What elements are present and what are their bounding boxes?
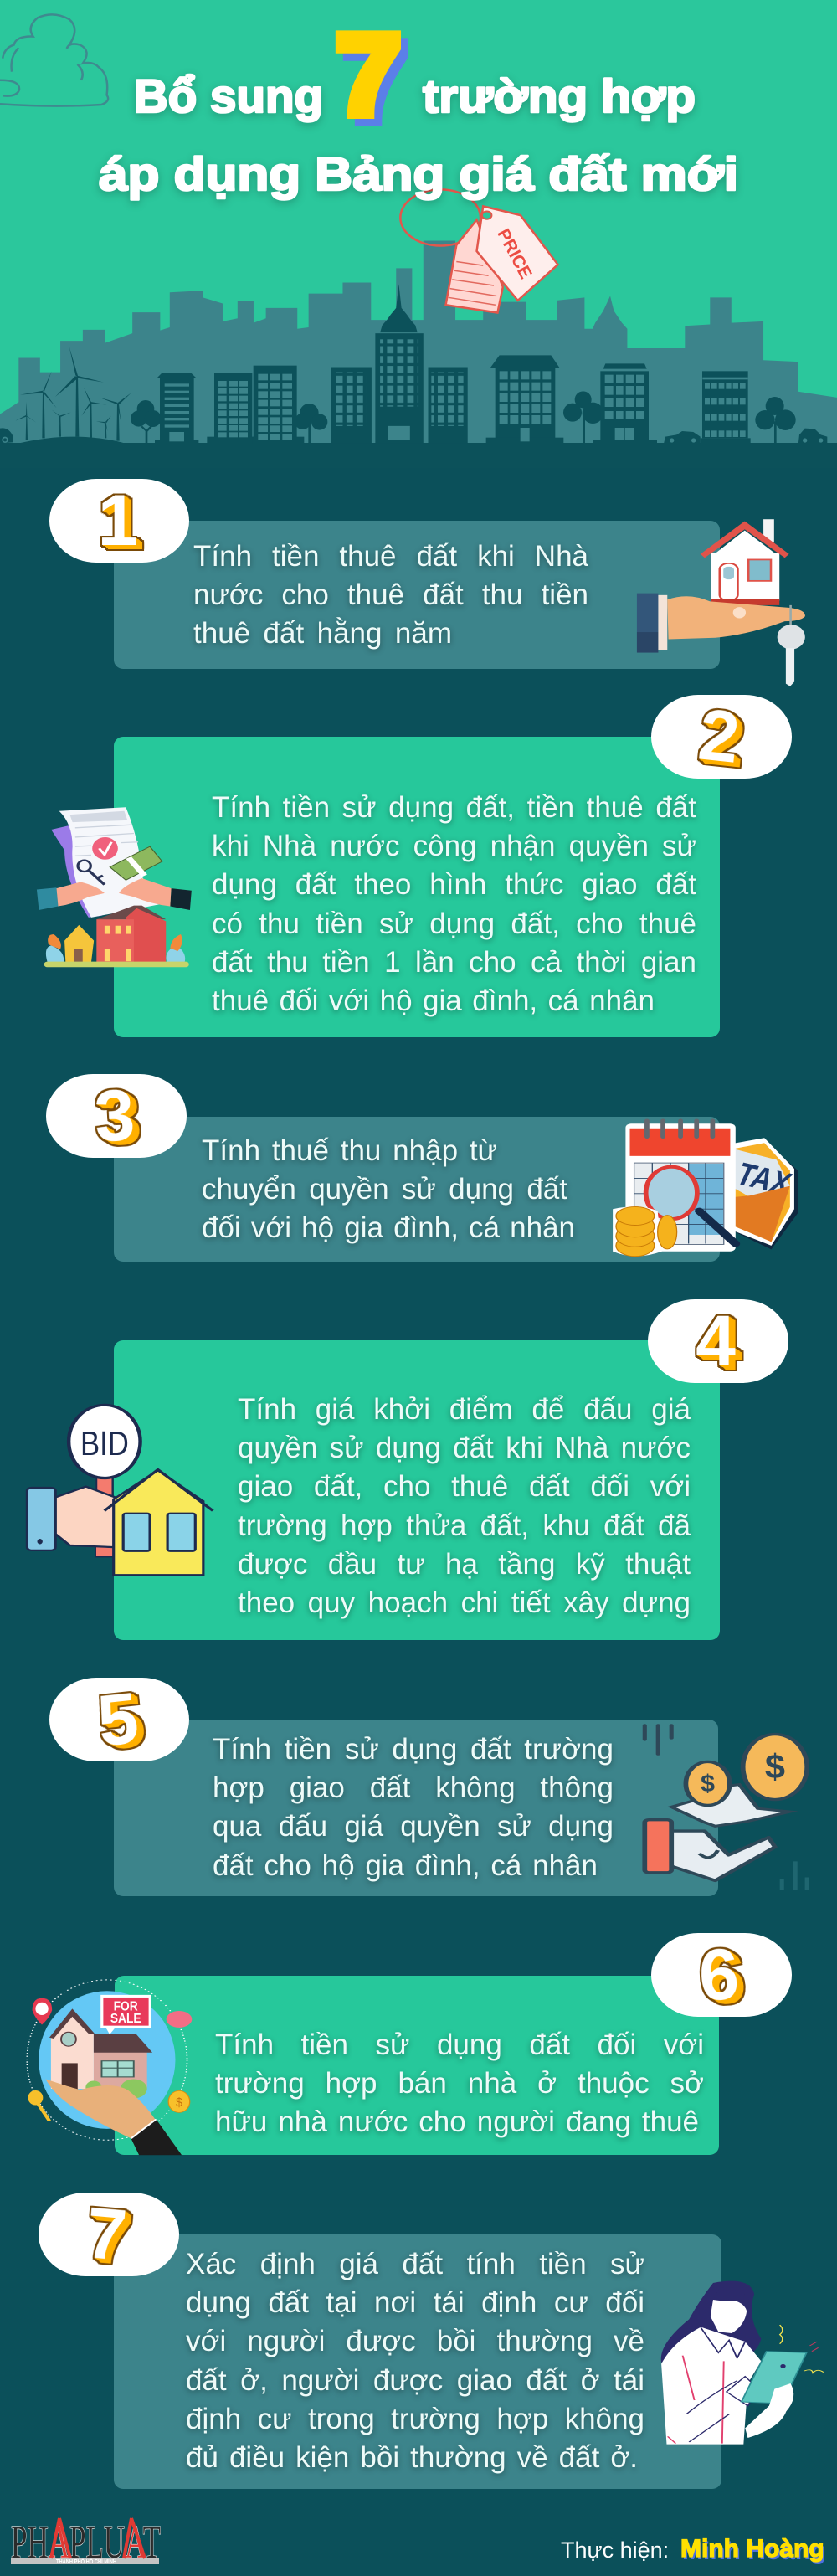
icon: house for sale on hand: SALE <box>110 2011 141 2026</box>
panel: case 4 <box>25 1299 788 1640</box>
body text: Xác định giá đất tính tiền sử <box>186 2248 644 2280</box>
number badge 6: 6 <box>697 1934 741 2016</box>
title: áp dụng Bảng giá đất mới <box>99 147 738 200</box>
body text: dụng đất tại nơi tái định cư đối <box>186 2286 644 2319</box>
icon: house for sale on hand: $ <box>176 2095 182 2110</box>
body text: thuê đất hằng năm <box>193 617 452 650</box>
logo: Pháp Luật: THÀNH PHỐ HỒ CHÍ MINH <box>56 2557 116 2565</box>
number badge 3: 3 <box>93 1075 136 1157</box>
panel: case 1 <box>49 479 805 686</box>
panel: case 7 <box>39 2193 824 2489</box>
icon: bid sign and house: BID <box>80 1425 128 1463</box>
body text: Tính tiền thuê đất khi Nhà <box>193 540 588 573</box>
price tag: PRICE <box>493 225 536 282</box>
body text: quyền sử dụng đất khi Nhà nước <box>238 1432 691 1464</box>
number badge 6 <box>651 1933 792 2017</box>
panel background <box>114 1340 720 1640</box>
panel background <box>114 2234 721 2489</box>
icon: hand receiving coins: $ <box>701 1770 716 1797</box>
number badge 5 <box>49 1678 189 1761</box>
icon: hand receiving coins: $ <box>765 1747 785 1785</box>
panel: case 3 <box>46 1074 798 1262</box>
body text: hữu nhà nước cho người đang thuê <box>215 2106 699 2138</box>
body text: chuyển quyền sử dụng đất <box>202 1173 567 1206</box>
back skyline silhouette <box>0 240 837 449</box>
body text: trường hợp thửa đất, khu đất đã <box>238 1509 691 1542</box>
icon: contract, money and house <box>37 807 192 968</box>
icon: tax calendar, coins, magnifier: TAX <box>731 1156 797 1201</box>
icon: house for sale on hand: FOR <box>113 1998 138 2013</box>
icon: woman with tablet <box>661 2280 824 2445</box>
body text: được đầu tư hạ tầng kỹ thuật <box>238 1548 691 1581</box>
left part of the city with wind turbines <box>0 347 327 444</box>
body text: thuê đối với hộ gia đình, cá nhân <box>212 985 655 1017</box>
panel: case 2 <box>37 694 792 1037</box>
icon: house on hand with key <box>636 519 805 686</box>
header: green banner with title and city skyline <box>0 0 837 443</box>
body text <box>201 1134 576 1247</box>
number badge 2: 2 <box>695 694 743 779</box>
body text: nước cho thuê đất thu tiền <box>193 578 588 611</box>
body text: theo quy hoạch chi tiết xây dựng <box>238 1586 691 1619</box>
big number 7: 7 <box>336 11 401 138</box>
body text: Tính tiền sử dụng đất trường <box>213 1733 614 1766</box>
body text: đủ điều kiện bồi thường về đất ở. <box>186 2441 638 2474</box>
credit line <box>561 2535 824 2564</box>
number badge 2 <box>651 695 792 779</box>
author name: Minh Hoàng <box>680 2535 824 2563</box>
logo: Pháp Luật: PHAPLUAT <box>11 2517 161 2568</box>
body text: trường hợp bán nhà ở thuộc sở <box>215 2067 704 2100</box>
body text: với người được bồi thường về <box>186 2325 644 2357</box>
title: Bổ sung <box>134 69 323 122</box>
number badge 1 <box>49 479 189 563</box>
icon: house for sale on hand <box>26 1979 193 2155</box>
body text: có thu tiền sử dụng đất, cho thuê <box>212 908 696 940</box>
body text: Tính giá khởi điểm để đấu giá <box>238 1393 691 1426</box>
icon: tax calendar, coins, magnifier <box>613 1118 798 1257</box>
body text: đất cho hộ gia đình, cá nhân <box>213 1849 598 1882</box>
icon: hand receiving coins <box>642 1724 809 1890</box>
panel background <box>114 1117 720 1262</box>
panel: case 5 <box>49 1678 809 1896</box>
body text <box>210 791 698 1021</box>
panel: case 6 <box>26 1933 792 2155</box>
body text <box>193 540 589 653</box>
body text: định cư trong trường hợp không <box>186 2403 644 2435</box>
body text: đối với hộ gia đình, cá nhân <box>202 1211 575 1244</box>
panel background <box>115 1976 719 2155</box>
number badge 7: 7 <box>83 2193 130 2276</box>
cloud outline <box>0 14 108 106</box>
number badge 7 <box>39 2193 179 2276</box>
title: trường hợp <box>423 69 696 122</box>
body text <box>213 2028 705 2142</box>
body text: dụng đất theo hình thức giao đất <box>212 868 696 901</box>
panel background <box>114 521 720 669</box>
body text: qua đấu giá quyền sử dụng <box>213 1810 614 1843</box>
body text: giao đất, cho thuê đất đối với <box>238 1470 691 1503</box>
credit label: Thực hiện: <box>561 2537 669 2563</box>
title <box>99 69 738 200</box>
body text: Tính tiền sử dụng đất đối với <box>215 2028 704 2061</box>
ground band <box>0 443 837 468</box>
body text: khi Nhà nước công nhận quyền sử <box>212 830 696 862</box>
body text: Tính thuế thu nhập từ <box>202 1134 497 1167</box>
number badge 4 <box>648 1299 788 1383</box>
right part of the city with cars <box>486 355 827 444</box>
central tower and flanking buildings <box>331 284 468 444</box>
number badge 4: 4 <box>696 1301 736 1381</box>
number badge 1: 1 <box>98 481 137 561</box>
body text: hợp giao đất không thông <box>213 1771 614 1804</box>
body text: đất thu tiền 1 lần cho cả thời gian <box>212 946 696 979</box>
body text: Tính tiền sử dụng đất, tiền thuê đất <box>212 791 696 824</box>
number badge 3 <box>46 1074 187 1158</box>
body text <box>211 1733 614 1885</box>
panel background <box>114 1720 718 1896</box>
body text: đất ở, người được giao đất ở tái <box>186 2364 644 2397</box>
number badge 5: 5 <box>94 1678 141 1761</box>
price tag <box>400 189 558 313</box>
big number 7: 7 <box>343 18 408 146</box>
icon: bid sign and house <box>25 1403 214 1576</box>
city skyline <box>0 240 837 468</box>
body text <box>184 2248 645 2477</box>
panel background <box>114 737 720 1037</box>
body text <box>236 1393 692 1622</box>
